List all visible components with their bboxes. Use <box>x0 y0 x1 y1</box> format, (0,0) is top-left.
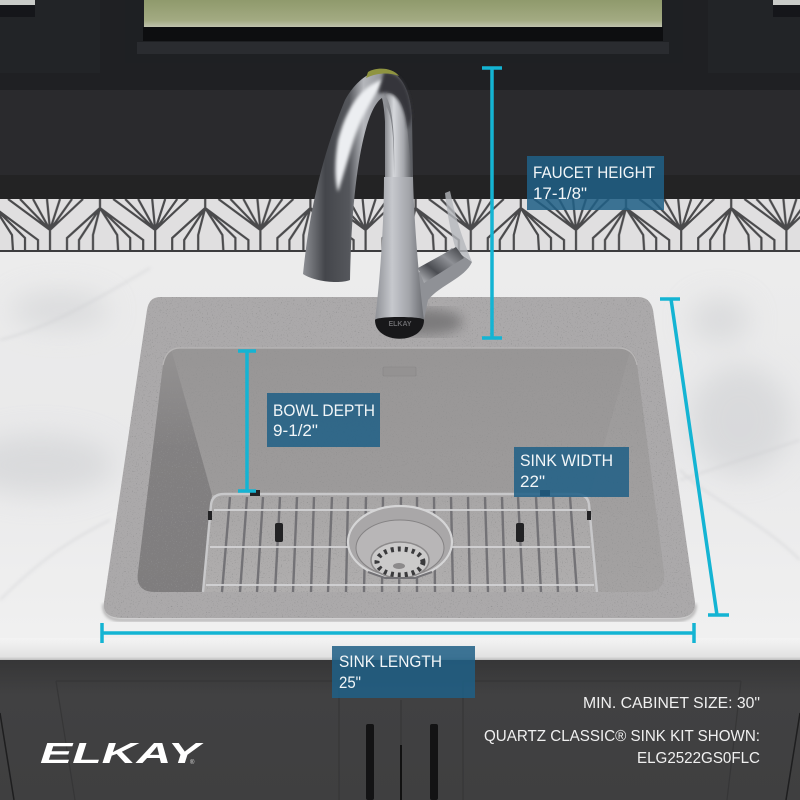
faucet base <box>375 317 424 339</box>
cabinet door panels <box>56 681 741 800</box>
sink top surface <box>104 297 695 618</box>
logo: Elkay: ® <box>190 759 195 766</box>
faucet lever blade <box>445 191 472 262</box>
faucet column <box>375 177 424 320</box>
wire grid <box>203 494 597 592</box>
spout highlight <box>335 79 384 192</box>
dimension: bowl depth <box>238 351 380 491</box>
label: sink length: 25" <box>339 674 361 692</box>
label: bowl depth: 9-1/2" <box>273 422 318 440</box>
cabinet handles <box>366 724 438 800</box>
faucet: ELKAY <box>388 321 412 328</box>
label: sink width <box>514 447 629 497</box>
label: bowl depth: BOWL DEPTH <box>273 402 375 420</box>
logo: Elkay <box>40 738 204 770</box>
label: sink length <box>332 646 475 698</box>
cabinet size and model text: ELG2522GS0FLC <box>637 750 760 767</box>
cabinet size and model text: MIN. CABINET SIZE: 30" <box>583 695 760 712</box>
marble countertop <box>0 252 800 660</box>
faucet spout <box>303 70 413 282</box>
sink <box>104 297 695 620</box>
label: faucet height: FAUCET HEIGHT <box>533 164 655 182</box>
cabinet size and model text <box>484 695 760 767</box>
faucet <box>303 69 472 339</box>
spout neck <box>384 93 412 178</box>
drain strainer <box>348 506 452 578</box>
dimension: faucet height <box>482 68 664 338</box>
label: sink width: SINK WIDTH <box>520 452 613 470</box>
cabinet <box>0 660 800 800</box>
dimension: sink length <box>102 623 694 698</box>
dimension: sink width <box>514 299 729 615</box>
label: faucet height: 17-1/8" <box>533 185 587 203</box>
tile backsplash <box>0 199 800 252</box>
logo: Elkay: ELKAY <box>40 738 204 770</box>
faucet column flare <box>405 248 472 320</box>
window wall <box>0 0 800 200</box>
label: sink length: SINK LENGTH <box>339 653 442 671</box>
label: sink width: 22" <box>520 473 545 491</box>
label: faucet height <box>527 156 664 210</box>
bowl <box>138 348 664 592</box>
cabinet size and model text: QUARTZ CLASSIC® SINK KIT SHOWN: <box>484 728 760 745</box>
window glass <box>144 0 662 27</box>
grid clips <box>208 490 591 542</box>
faucet handle hub <box>418 247 464 283</box>
label: bowl depth <box>267 393 380 447</box>
